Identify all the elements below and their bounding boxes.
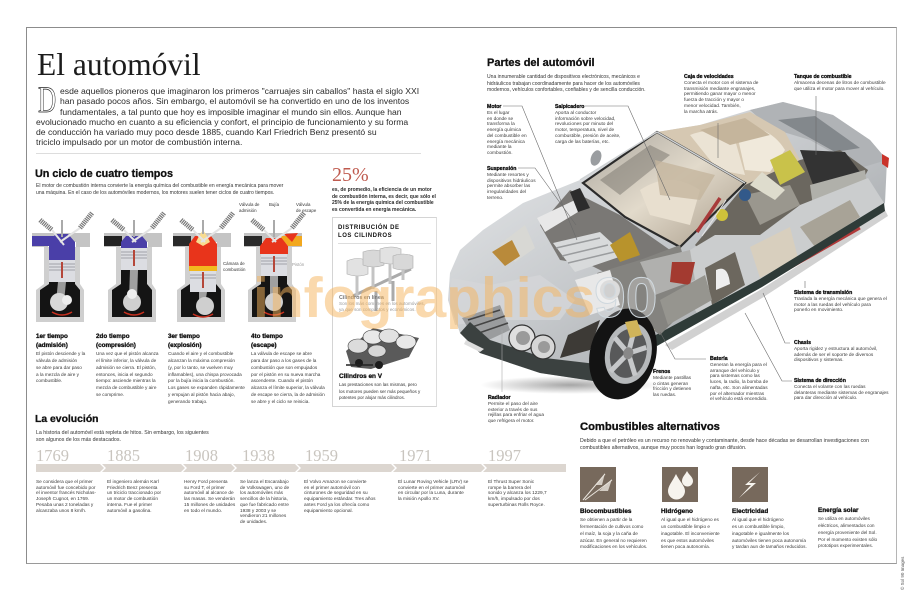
event 1959	[304, 446, 376, 514]
panel: evolution timeline	[35, 414, 566, 525]
event 1938: vendieron 21 millones	[240, 514, 286, 519]
mirror	[589, 149, 603, 167]
description: alternative fuels: Debido a que el petróleo es un recurso no renovable y contaminante, desde hace décadas se desarrollan investigaciones con	[580, 438, 869, 444]
event 1908	[184, 446, 236, 514]
label: motor: Motor	[487, 104, 501, 110]
event 1997: 1997	[488, 446, 521, 465]
image credit: © Sol 90 Images	[900, 557, 905, 590]
stroke 4 text	[250, 333, 325, 404]
stroke 1 text: combustible.	[36, 378, 62, 383]
stroke 1 text: (admisión)	[36, 342, 68, 348]
label: fuel tank: Almacena decenas de litros de combustible	[794, 81, 886, 86]
text: V cylinders: Cilindros en V	[339, 373, 382, 380]
stroke 3 text: 3er tiempo	[168, 333, 200, 340]
label: motor: en donde se	[487, 117, 513, 122]
label: motor: combustión.	[487, 151, 513, 156]
event 1971: 1971	[399, 446, 432, 465]
label: gearbox: fuerza de tracción y mayor o	[684, 98, 744, 103]
fuel: biofuels: Se obtienen a partir de la	[580, 517, 632, 522]
event 1769: automóvil fue concebido por	[36, 486, 95, 491]
fuel: electricity: automóviles tienen poca autonomía	[732, 538, 806, 543]
ground shadow	[480, 376, 660, 394]
label: dashboard: información sobre velocidad,	[555, 117, 615, 122]
label: gearbox: Conecta el motor con el sistema de	[684, 81, 758, 86]
icon: engine stroke 4	[244, 212, 306, 322]
panel: four-stroke cycle	[32, 168, 325, 404]
label: motor: transforma la	[487, 122, 515, 127]
label: battery	[710, 356, 768, 402]
label: brakes: Mediante pastillas	[653, 376, 691, 381]
fuel: solar	[818, 507, 884, 551]
text: inline cylinders: Son los más comunes en los automóviles, ya que son compactos y económicos.	[339, 301, 425, 312]
drop cap: D	[38, 80, 56, 121]
label: battery: nafta, etc. Son alimentadas	[710, 386, 768, 391]
label: gearbox: la marcha atrás.	[684, 110, 718, 115]
description: car parts	[487, 74, 646, 93]
stroke 3 text: y empujan al pistón hacia abajo,	[168, 392, 235, 397]
label: radiator: que refrigera el motor.	[488, 419, 534, 424]
label: steering: Sistema de dirección	[794, 378, 846, 384]
intro text block	[36, 80, 419, 147]
event 1938: los automóviles más	[240, 491, 283, 496]
stroke 1 text: 1er tiempo	[36, 333, 68, 340]
event 1885: un motor de combustión	[107, 497, 158, 502]
label: fuel tank: Tanque de combustible	[794, 74, 852, 80]
stroke 3 text: Los gases se expanden rápidamente	[168, 385, 245, 390]
engine part labels: Válvula de	[239, 202, 260, 207]
event 1769	[36, 446, 96, 514]
hood front panel	[448, 275, 575, 325]
stroke 2 text: el límite inferior, la válvula de	[96, 358, 156, 363]
event 1885: automóvil a gasolina.	[107, 509, 152, 514]
label: steering	[794, 378, 889, 401]
label: radiator: rejillas para enfriar el agua	[488, 413, 544, 418]
label: dashboard: carga de las baterías, etc.	[555, 140, 610, 145]
engine part labels: Pistón	[292, 262, 304, 267]
heading: alternative fuels: Combustibles alternativos	[580, 421, 720, 433]
intro text block: han pasado pocos años. Sin embargo, el automóvil se ha convertido en uno de los inventos	[60, 96, 409, 106]
callout: 25% efficiency: de combustión interna, es decir, que sólo el	[332, 194, 436, 200]
event 1997: sonido y alcanza los 1229,7	[488, 491, 547, 496]
description: four-stroke cycle	[36, 183, 284, 196]
event 1959: en el primer automóvil con	[304, 486, 360, 491]
stroke 3 text: alcanzan la máxima compresión	[168, 358, 235, 363]
event 1997: El Thrust Super Sonic	[488, 480, 534, 485]
description: evolution	[36, 430, 209, 443]
rear deck	[750, 102, 887, 168]
fuel: biofuels: modificaciones en los vehículos.	[580, 544, 647, 549]
fuel: hydrogen: Al igual que el hidrógeno es	[661, 517, 719, 522]
stroke 1 text: El pistón desciende y la	[36, 351, 85, 356]
event 1908: 1908	[185, 446, 218, 465]
illustration: cutaway car	[448, 102, 889, 400]
label: motor: mediante la	[487, 145, 512, 150]
label: brakes: las ruedas.	[653, 393, 676, 398]
stroke 1 text: se abre para dar paso	[36, 365, 82, 370]
fuel: electricity: es un combustible limpio,	[732, 524, 785, 529]
stroke 1 text: válvula de admisión	[36, 358, 77, 363]
label: fuel tank	[794, 74, 886, 92]
event 1997: rompe la barrera del	[488, 486, 531, 491]
event 1938: que fue fabricado entre	[240, 503, 289, 508]
event 1971	[398, 446, 468, 502]
label: motor: Es el lugar	[487, 111, 509, 116]
stroke 4 text: por el pistón en su nueva marcha	[251, 372, 320, 377]
engine part labels: admisión	[239, 208, 257, 213]
label: gearbox	[684, 74, 758, 115]
event 1959: cinturones de seguridad en su	[304, 491, 368, 496]
label: gearbox: transmisión mediante engranajes,	[684, 87, 755, 92]
event 1885: interna. Fue el primer	[107, 503, 152, 508]
stroke 2 text: (compresión)	[96, 342, 136, 348]
label: fuel tank: que utiliza el motor para mover al vehículo.	[794, 87, 885, 92]
label: battery: Generan la energía para el	[710, 363, 767, 368]
label: transmission: Sistema de transmisión	[794, 290, 852, 296]
callout: 25% efficiency	[332, 164, 436, 212]
label: battery: para sistemas como las	[710, 374, 760, 379]
event 1908: en todo el mundo.	[184, 509, 222, 514]
label: brakes: fricción y detienen	[653, 387, 691, 392]
label: steering: delanteras mediante sistemas de engranajes	[794, 391, 889, 396]
panel: cylinder distribution	[332, 217, 437, 407]
label: steering: Conecta el volante con las ruedas	[794, 385, 866, 390]
stroke 2 text: 2do tiempo	[96, 333, 130, 340]
stroke 2 text: mezcla de combustible y aire	[96, 385, 156, 390]
label: transmission	[794, 290, 887, 313]
intro text block: triciclo impulsado por un motor de combustión interna.	[36, 137, 242, 147]
stroke 4 text: se abre y el ciclo se reinicia.	[251, 399, 310, 404]
callout: 25% efficiency: es convertida en energía mecánica.	[332, 206, 416, 212]
body	[448, 102, 887, 382]
fuel: electricity: inagotable e igualmente los	[732, 531, 789, 536]
label: motor: energía química	[487, 128, 521, 133]
heading: cylinder distribution: LOS CILINDROS	[338, 233, 392, 239]
label: battery: el vehículo está encendido.	[710, 397, 768, 402]
label: dashboard: combustible, presión de aceite,	[555, 134, 620, 139]
label: suspension: Suspensión	[487, 166, 516, 172]
fuel: hydrogen: es que estos automóviles	[661, 538, 714, 543]
description: evolution: La historia del automóvil está repleta de hitos. Sin embargo, los siguientes	[36, 430, 209, 436]
intro text block: evolucionado mucho en cuanto a su eficiencia y confort, el principio de funcionamiento y su forma	[36, 117, 408, 127]
window frame	[580, 132, 745, 183]
label: brakes: o cintas generan	[653, 382, 688, 387]
red struts	[697, 198, 720, 232]
panel: alternative fuels	[580, 421, 877, 549]
label: suspension: Mediante resortes y	[487, 173, 529, 178]
watermark: 90	[594, 266, 657, 330]
label: chassis: además de ser el soporte de diversos	[794, 353, 873, 358]
fuel: solar: energía proveniente del Sol.	[818, 530, 877, 535]
event 1769: Se considera que el primer	[36, 480, 93, 485]
fuel: biofuels: el maíz, la soja y la caña de	[580, 531, 638, 536]
intro text block: de conducción ha variado muy poco desde 1885, cuando Karl Friedrich Benz presentó su	[36, 127, 377, 137]
heading: four-stroke cycle: Un ciclo de cuatro tiempos	[35, 168, 173, 180]
fuel: hydrogen: inagotable. El inconveniente	[661, 531, 720, 536]
callout: 25% efficiency: es, de promedio, la eficiencia de un motor	[332, 187, 432, 193]
heading: car parts: Partes del automóvil	[487, 57, 595, 69]
windshield	[583, 132, 745, 247]
fuel: hydrogen: Hidrógeno	[661, 508, 693, 515]
event 1908: automóvil al alcance de	[184, 491, 234, 496]
engine part labels: combustión	[223, 267, 245, 272]
sill	[652, 203, 885, 346]
watermark: infographics	[253, 266, 595, 330]
stroke 2 text: Una vez que el pistón alcanza	[96, 351, 159, 356]
description: alternative fuels	[580, 438, 869, 451]
event 1938: 1938	[242, 446, 275, 465]
text: inline cylinders	[339, 295, 425, 312]
stroke 3 text: por la bujía inicia la combustión.	[168, 378, 235, 383]
fuel: solar: Energía solar	[818, 507, 858, 514]
label: dashboard: Salpicadero	[555, 104, 584, 110]
label: battery: arranque del vehículo y	[710, 369, 759, 374]
event 1769: Joseph Cugnot, en 1769.	[36, 497, 89, 502]
stroke 4 text: combustión que son empujados	[251, 365, 317, 370]
fuel: biofuels: fermentación de cultivos como	[580, 524, 643, 529]
stroke 2 text: tiempo: asciende mientras la	[96, 378, 156, 383]
text: V cylinders: los motores pueden ser más pequeños y	[339, 389, 420, 394]
event 1971: convierte en el primer automóvil	[398, 486, 465, 491]
text: inline cylinders: Cilindros en línea	[339, 295, 384, 301]
description: car parts: Una innumerable cantidad de dispositivos electrónicos, mecánicos e	[487, 74, 640, 80]
event 1885: un triciclo traccionado por	[107, 491, 161, 496]
label: suspension: terreno.	[487, 196, 503, 201]
label: chassis: dispositivos y sistemas.	[794, 358, 844, 363]
event 1885: Friedrich Benz presenta	[107, 486, 157, 491]
event 1938: sencillos de la historia,	[240, 497, 288, 502]
title: El automóvil	[37, 47, 201, 82]
engine part labels: de escape	[296, 208, 316, 213]
fuel: electricity: Electricidad	[732, 508, 768, 515]
label: suspension: irregularidades del	[487, 190, 526, 195]
event 1769: alcanzaba unos 8 km/h.	[36, 509, 86, 514]
label: transmission: ponerlo en movimiento.	[794, 308, 843, 313]
engine bay	[540, 190, 670, 290]
text: V cylinders: potentes por alojar más cilindros.	[339, 395, 405, 400]
stroke 4 text: 4to tiempo	[251, 333, 283, 340]
label: battery: por el alternador mientras	[710, 392, 764, 397]
label: radiator: Radiador	[488, 395, 510, 401]
label: suspension: permite absorber las	[487, 184, 530, 189]
engine part labels: Válvula	[296, 202, 310, 207]
callout: 25% efficiency: 25%	[332, 164, 369, 186]
label: motor: energía mecánica	[487, 140, 525, 145]
fuel: hydrogen: un combustible limpio e	[661, 524, 710, 529]
label: suspension: dispositivos hidráulicos	[487, 179, 536, 184]
event 1908: 15 millones de unidades	[184, 503, 235, 508]
engine part labels	[223, 202, 316, 272]
stroke 4 text: La válvula de escape se abre	[251, 351, 312, 356]
event 1769: Pesaba unas 2 toneladas y	[36, 503, 93, 508]
grille	[462, 305, 510, 345]
stroke 2 text: admisión se cierra. El pistón,	[96, 365, 156, 370]
intro text block: esde aquellos pioneros que imaginaron los primeros "carruajes sin caballos" hasta el siglo XXI	[60, 86, 419, 96]
engine part labels: Bujía	[269, 202, 279, 207]
cabin interior	[657, 112, 800, 185]
stroke 3 text: (y, por lo tanto, se vuelven muy	[168, 365, 233, 370]
stroke 2 text: se comprime.	[96, 392, 124, 397]
description: evolution: son algunos de los más destacados.	[36, 437, 121, 443]
label: suspension	[487, 166, 536, 201]
icon: biofuel wheat	[580, 467, 616, 502]
event 1959: antes Ford ya los ofrecía como	[304, 503, 369, 508]
event 1997: superturbinas Rolls Royce.	[488, 503, 545, 508]
fuel: electricity	[732, 508, 808, 552]
label: gearbox: menor velocidad. También,	[684, 104, 741, 109]
fuel: biofuels	[580, 508, 652, 552]
event 1908: Henry Ford presenta	[184, 480, 228, 485]
door cutaway	[690, 178, 884, 318]
event 1959: El Volvo Amazon se convierte	[304, 480, 367, 485]
stroke 3 text: Cuando el aire y el combustible	[168, 351, 233, 356]
stroke 4 text: de escape se cierra, la de admisión	[251, 392, 325, 397]
stroke 3 text: (explosión)	[168, 342, 202, 348]
label: radiator: exterior a través de sus	[488, 408, 537, 413]
event 1885	[107, 446, 161, 514]
plate and lower bumper	[460, 322, 605, 382]
label: brakes: Frenos	[653, 369, 670, 375]
icon: hydrogen drops	[662, 467, 698, 502]
label: brakes	[653, 368, 691, 398]
fuel: solar: Por el momento existen sólo	[818, 537, 877, 542]
event 1959: equipamiento opcional.	[304, 509, 353, 514]
heading: evolution: La evolución	[35, 414, 99, 425]
fuel: solar: prototipos experimentales.	[818, 543, 873, 548]
event 1938	[240, 446, 289, 525]
label: radiator: Permite el paso del aire	[488, 402, 538, 407]
heading: cylinder distribution	[338, 224, 431, 244]
stroke 4 text: (escape)	[251, 342, 277, 348]
label: dashboard	[555, 104, 620, 145]
icon: engine stroke 2	[104, 212, 166, 322]
fuel: biofuels: Biocombustibles	[580, 508, 632, 515]
stroke 3 text	[168, 333, 245, 404]
event 1997	[488, 446, 547, 508]
icon: electricity bolt	[732, 467, 768, 502]
icon: engine stroke 3	[173, 212, 235, 322]
event 1938: de unidades.	[240, 520, 267, 525]
event 1971: la misión Apollo XV.	[398, 497, 440, 502]
event 1959: 1959	[305, 446, 338, 465]
label: dashboard: revoluciones por minuto del	[555, 122, 613, 127]
label: chassis: Aporta rigidez y estructura al automóvil,	[794, 347, 877, 352]
label: steering: para dar dirección al vehículo.	[794, 396, 857, 401]
fuel: solar: Se utiliza en automóviles	[818, 516, 870, 521]
text: V cylinders: Las prestaciones son las mismas, pero	[339, 382, 417, 387]
fuel: biofuels: azúcar. En general no requieren	[580, 538, 647, 543]
label: battery: Batería	[710, 356, 728, 362]
event 1938: de Volkswagen, uno de	[240, 486, 289, 491]
engine part labels: Cámara de	[223, 261, 245, 266]
event 1971: en circular por la Luna, durante	[398, 491, 464, 496]
fuel: solar: eléctricos, alimentados con	[818, 523, 875, 528]
trunk and mechanical cutaway	[695, 150, 868, 270]
description: car parts: hidráulicos trabajan coordinadamente para hacer de los automóviles	[487, 81, 640, 87]
label: gearbox: Caja de velocidades	[684, 74, 734, 80]
intro text block: fundamentales, a tal punto que hoy es imposible imaginar el mundo sin ellos. Aunque han	[60, 106, 402, 116]
event 1908: su Ford T, el primer	[184, 486, 225, 491]
event 1885: El ingeniero alemán Karl	[107, 480, 159, 485]
stroke 3 text: inflamables), una chispa provocada	[168, 372, 242, 377]
stroke 2 text	[96, 333, 159, 397]
label: chassis: Chasis	[794, 340, 811, 346]
heading: cylinder distribution: DISTRIBUCIÓN DE	[338, 225, 400, 231]
event 1885: 1885	[107, 446, 140, 465]
stroke 4 text: alcanza el límite superior, la válvula	[251, 385, 325, 390]
label: motor	[487, 104, 527, 156]
stroke 3 text: generando trabajo.	[168, 399, 207, 404]
stroke 4 text: para dar paso a los gases de la	[251, 358, 316, 363]
stroke 1 text	[36, 333, 86, 383]
stroke 2 text: entonces, inicia el segundo	[96, 372, 153, 377]
front wheel well cutaway	[597, 245, 695, 335]
fuel: hydrogen	[661, 508, 723, 552]
event 1938: Se lanza el Escarabajo	[240, 480, 289, 485]
caliper	[625, 320, 642, 338]
description: car parts: modernos, vehículos confortables, confiables y de sencilla conducción.	[487, 87, 646, 93]
panel: car parts	[487, 57, 889, 424]
label: dashboard: motor, temperatura, nivel de	[555, 128, 614, 133]
event 1938: 1938 y 2003 y se	[240, 509, 276, 514]
front wheel	[580, 301, 666, 407]
label: battery: luces, la radio, la bomba de	[710, 380, 768, 385]
icon: engine stroke 1	[32, 212, 94, 322]
label: chassis	[794, 340, 877, 363]
fuel: electricity: y tardan aun de tamaños reducidos.	[732, 544, 807, 549]
text: V cylinders	[339, 373, 420, 400]
event 1769: el inventor francés Nicholas-	[36, 491, 96, 496]
event 1971: El Lunar Roving Vehicle (LRV) se	[398, 480, 468, 485]
callout: 25% efficiency: 25% de la energía química del combustible	[332, 200, 434, 206]
event 1908: las masas. Se venderán	[184, 497, 235, 502]
stroke 4 text: ascendente. Cuando el pistón	[251, 378, 313, 383]
label: transmission: Traslada la energía mecánica que genera el	[794, 297, 887, 302]
label: gearbox: permitiendo ganar mayor o menor	[684, 92, 756, 97]
event 1769: 1769	[36, 446, 69, 465]
stroke 1 text: a la mezcla de aire y	[36, 372, 79, 377]
label: transmission: motor a las ruedas del vehículo para	[794, 303, 871, 308]
label: motor: del combustible en	[487, 134, 527, 139]
fuel: hydrogen: tienen poca autonomía.	[661, 544, 710, 549]
event 1997: km/h, impulsado por dos	[488, 497, 540, 502]
event 1959: equipamiento estándar. Tres años	[304, 497, 376, 502]
description: alternative fuels: combustibles alternativos, aunque muy pocos han logrado gran difusión.	[580, 445, 746, 451]
description: four-stroke cycle: El motor de combustión interna convierte la energía química del combustible en energía mecánica para mover	[36, 183, 283, 189]
description: four-stroke cycle: una máquina. En el caso de los automóviles modernos, los motores suelen tener ciclos de cuatro tiempos.	[36, 190, 274, 196]
label: radiator	[488, 394, 544, 424]
headlights	[509, 325, 535, 351]
fuel: electricity: Al igual que el hidrógeno	[732, 517, 784, 522]
label: dashboard: Aporta al conductor	[555, 111, 596, 116]
